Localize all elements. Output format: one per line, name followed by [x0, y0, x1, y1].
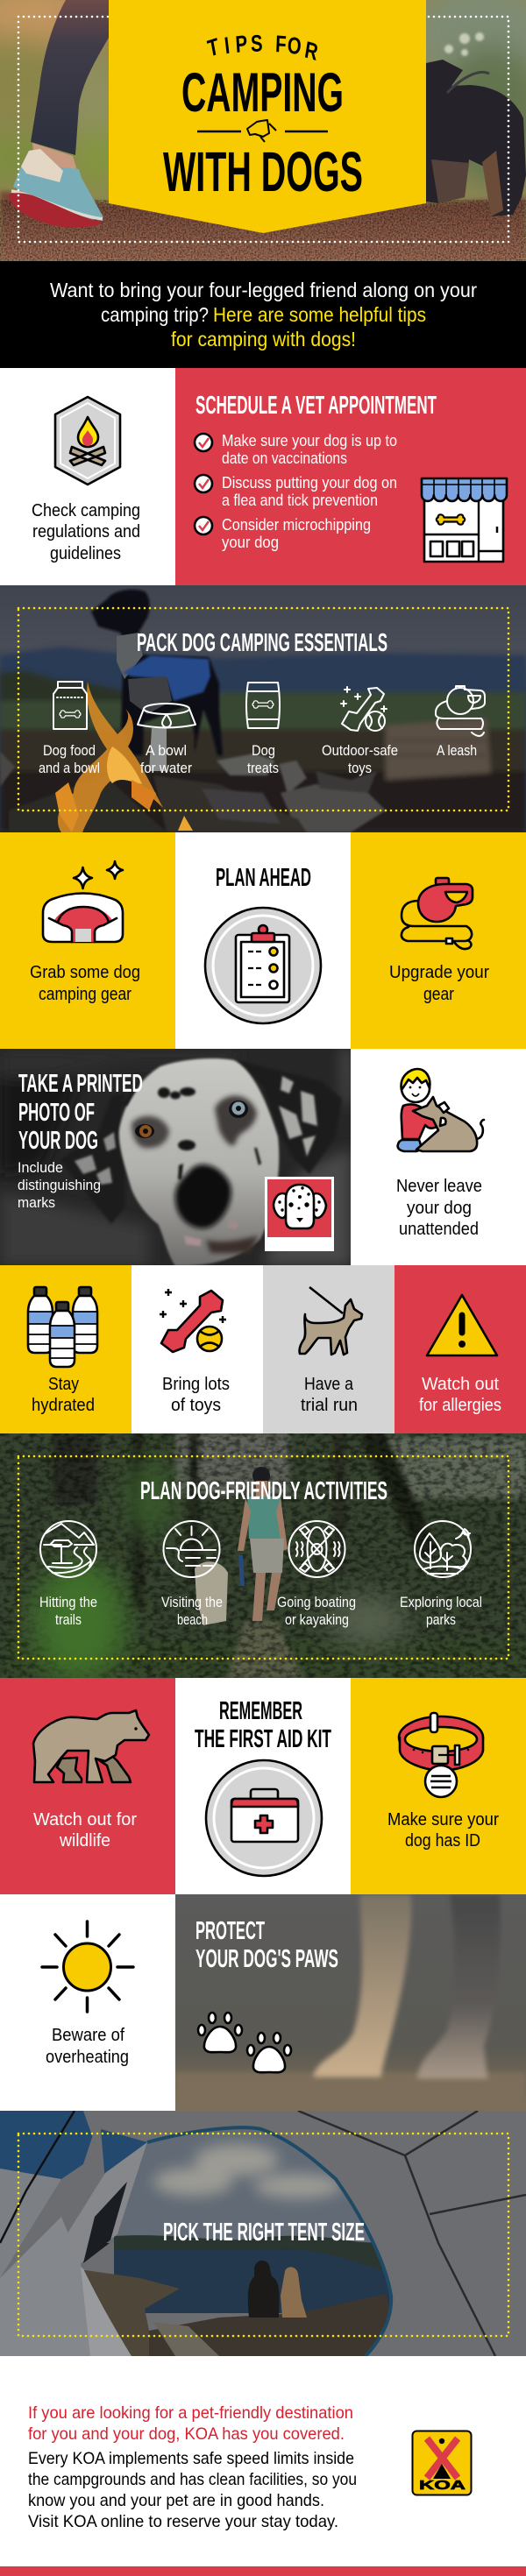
photo: hiker and dog — [195, 1467, 288, 1625]
intro text: Here are some helpful tips — [213, 303, 426, 326]
text: never leave your dog unattended — [396, 1177, 482, 1239]
text: make sure your dog has id: Make sure your — [387, 1810, 499, 1829]
intro text: Want to bring your four-legged friend along on your — [50, 279, 477, 301]
text: stay hydrated: Stay — [48, 1375, 79, 1394]
heading: protect your dog's paws: PROTECT — [195, 1917, 265, 1945]
photo: dalmatian — [0, 1049, 351, 1266]
icon: water bowl — [138, 704, 195, 727]
icon: paw prints — [198, 2013, 291, 2072]
icon: water bottles — [28, 1287, 97, 1367]
text: exploring local parks: parks — [426, 1612, 456, 1628]
text: going boating or kayaking — [277, 1595, 356, 1628]
checklist: Make sure your dog is up to — [222, 432, 397, 449]
icon: dog treats — [246, 683, 280, 728]
text: outdoor-safe toys: Outdoor-safe — [322, 743, 398, 759]
footer text: Visit KOA online to reserve your stay today. — [28, 2512, 338, 2531]
text: have a trial run: Have a — [304, 1375, 354, 1394]
icon: first aid kit plate — [206, 1760, 322, 1876]
icon: leashed dog — [300, 1287, 362, 1355]
text: bring lots of toys: of toys — [171, 1396, 221, 1415]
text: bring lots of toys: Bring lots — [162, 1375, 230, 1394]
heading: remember the first aid kit: THE FIRST AID KIT — [195, 1725, 331, 1753]
title divider with dog icon — [197, 120, 328, 142]
intro text: for camping with dogs! — [171, 328, 356, 350]
text: check camping regulations: Check camping — [32, 501, 140, 520]
checklist: date on vaccinations — [222, 449, 347, 467]
heading: take a printed photo of your dog — [18, 1070, 143, 1155]
text: visiting the beach: beach — [177, 1612, 208, 1628]
panel: have a trial run — [263, 1265, 394, 1433]
icon: kayak — [289, 1521, 345, 1577]
text: never leave your dog unattended: Never leave — [396, 1177, 482, 1196]
icon: sun — [42, 1921, 133, 2012]
text: a bowl for water: for water — [140, 761, 192, 776]
intro text — [50, 279, 477, 350]
title banner — [109, 0, 426, 233]
text: watch out for wildlife — [33, 1810, 137, 1851]
panel: watch out for wildlife — [0, 1678, 175, 1894]
icon: dog food — [53, 682, 87, 729]
panel: printed photo of your dog — [0, 1049, 351, 1266]
text: dog treats — [247, 743, 279, 776]
panel: grab dog camping gear — [0, 832, 175, 1049]
panel: bring lots of toys — [132, 1265, 263, 1433]
text: include distinguishing marks: distinguishing — [18, 1178, 101, 1193]
heading: take a printed photo of your dog: TAKE A PRINTED — [18, 1070, 143, 1098]
text: check camping regulations — [32, 501, 140, 563]
icon: retractable leash — [436, 686, 485, 736]
text: watch out for wildlife: Watch out for — [33, 1810, 137, 1829]
text: exploring local parks — [400, 1595, 482, 1628]
text: check camping regulations: guidelines — [50, 544, 121, 563]
panel: plan ahead — [175, 832, 351, 1049]
text: never leave your dog unattended: unattended — [399, 1220, 479, 1239]
text: upgrade your gear: gear — [423, 985, 454, 1004]
checklist — [195, 432, 397, 551]
text: upgrade your gear: Upgrade your — [389, 963, 489, 982]
text: include distinguishing marks: Include — [18, 1160, 63, 1176]
icon: warning triangle — [427, 1295, 497, 1355]
footer red bar — [0, 2566, 526, 2576]
footer text — [28, 2403, 357, 2531]
footer text: know you and your pet are in good hands. — [28, 2491, 324, 2510]
title: with dogs: WITH DOGS — [163, 140, 363, 203]
text: check camping regulations: regulations and — [32, 522, 140, 541]
panel: schedule a vet appointment — [175, 368, 526, 585]
text: upgrade your gear — [389, 963, 489, 1004]
text: exploring local parks: Exploring local — [400, 1595, 482, 1610]
panel: remember the first aid kit — [175, 1678, 351, 1894]
text: grab some dog camping gear: camping gear — [39, 985, 132, 1004]
text: never leave your dog unattended: your dog — [407, 1199, 472, 1218]
icon: polaroid of dalmatian — [265, 1177, 334, 1251]
intro band — [0, 261, 526, 368]
icon: red leash — [402, 878, 473, 949]
icon: vet store — [422, 478, 507, 562]
photo: forest — [0, 1433, 526, 1678]
heading: remember the first aid kit: REMEMBER — [219, 1697, 302, 1725]
icon: sparkles and dog bed — [43, 861, 123, 942]
footer text: the campgrounds and has clean facilities, so you — [28, 2470, 357, 2489]
icon: campfire badge — [55, 397, 120, 485]
text: include distinguishing marks — [18, 1160, 101, 1211]
panel: upgrade your gear — [351, 832, 526, 1049]
icon: clipboard plate — [205, 908, 321, 1023]
text: visiting the beach — [161, 1595, 223, 1628]
heading: protect your dog's paws — [195, 1917, 338, 1973]
text: hitting the trails: trails — [55, 1612, 82, 1628]
photo: tent door edge and poles — [0, 2111, 526, 2356]
photo: tent walls — [0, 2111, 147, 2356]
text: outdoor-safe toys — [322, 743, 398, 776]
text: stay hydrated: hydrated — [32, 1396, 95, 1415]
photo: mountains — [0, 645, 526, 690]
heading: plan ahead: PLAN AHEAD — [216, 864, 311, 892]
text: outdoor-safe toys: toys — [348, 761, 372, 776]
checklist: a flea and tick prevention — [222, 492, 378, 509]
text: visiting the beach: Visiting the — [161, 1595, 223, 1610]
hero bokeh — [444, 32, 484, 56]
text: a leash: A leash — [437, 743, 477, 759]
text: dog treats: treats — [247, 761, 279, 776]
text: stay hydrated — [32, 1375, 95, 1415]
text: include distinguishing marks: marks — [18, 1195, 55, 1211]
text: watch out for allergies — [419, 1375, 501, 1415]
intro text: camping trip? — [101, 303, 209, 326]
footer text: for you and your dog, KOA has you covered. — [28, 2424, 345, 2444]
text: a bowl for water: A bowl — [146, 743, 187, 759]
hero dog — [426, 60, 526, 216]
text: dog treats: Dog — [252, 743, 275, 759]
text: hitting the trails: Hitting the — [39, 1595, 97, 1610]
checklist: Consider microchipping — [222, 516, 371, 534]
text: grab some dog camping gear: Grab some dog — [30, 963, 140, 982]
photo: field and ground — [0, 671, 526, 832]
icon: beach — [163, 1521, 219, 1577]
panel: pick the right tent size photo — [0, 2111, 526, 2356]
text: hitting the trails — [39, 1595, 97, 1628]
icon: outdoor toys — [341, 687, 387, 731]
checklist: Discuss putting your dog on — [222, 474, 397, 492]
photo: head — [119, 1058, 279, 1266]
footer text: If you are looking for a pet-friendly destination — [28, 2403, 353, 2423]
text: watch out for allergies: for allergies — [419, 1396, 501, 1415]
logo: koa — [412, 2431, 472, 2495]
panel: never leave your dog unattended — [351, 1049, 526, 1266]
panel: pack dog camping essentials photo — [0, 585, 526, 832]
photo: view through tent door — [79, 2120, 403, 2356]
logo: koa: KOA — [419, 2478, 466, 2493]
icon: collar and tag — [399, 1713, 483, 1797]
photo: rocks and logs — [0, 752, 386, 832]
panel: beware of overheating — [0, 1894, 175, 2111]
panel: plan dog-friendly activities photo — [0, 1433, 526, 1682]
text: make sure your dog has id: dog has ID — [405, 1831, 480, 1851]
footer: koa call to action — [0, 2356, 526, 2576]
photo: campfire flames — [55, 682, 193, 832]
title: camping: CAMPING — [181, 62, 344, 124]
panel: watch out for allergies — [394, 1265, 526, 1433]
text: a bowl for water — [140, 743, 192, 776]
hero: trail photo with walker and dog — [0, 0, 526, 261]
icon: trails — [40, 1521, 96, 1577]
text: going boating or kayaking: Going boating — [277, 1595, 356, 1610]
text: watch out for allergies: Watch out — [422, 1375, 499, 1394]
photo: black dog with blue coat — [91, 590, 223, 771]
text: grab some dog camping gear — [30, 963, 140, 1004]
title: tips for: TIPS FOR — [206, 31, 320, 67]
heading: take a printed photo of your dog: YOUR DOG — [18, 1127, 98, 1155]
photo: right ear — [237, 1060, 342, 1174]
text: dog food and a bowl: and a bowl — [39, 761, 100, 776]
photo: dog legs — [175, 1894, 526, 2111]
icon: bear — [33, 1710, 149, 1782]
checklist: your dog — [222, 534, 279, 551]
walker leg — [31, 0, 109, 155]
footer text: Every KOA implements safe speed limits inside — [28, 2449, 354, 2468]
icon: child hugging dog — [398, 1069, 484, 1151]
text: dog food and a bowl: Dog food — [43, 743, 96, 759]
text: beware of overheating: overheating — [46, 2048, 129, 2067]
text: watch out for wildlife: wildlife — [59, 1831, 110, 1851]
text: beware of overheating — [46, 2026, 129, 2067]
walker shoe — [9, 143, 103, 228]
heading: protect your dog's paws: YOUR DOG'S PAWS — [195, 1945, 338, 1973]
text: beware of overheating: Beware of — [52, 2026, 124, 2045]
text: going boating or kayaking: or kayaking — [285, 1612, 349, 1628]
icon: local parks — [415, 1521, 471, 1577]
panel: make sure your dog has id — [351, 1678, 526, 1894]
text: have a trial run — [301, 1375, 358, 1415]
panel: stay hydrated — [0, 1265, 132, 1433]
panel: check regulations — [0, 368, 175, 585]
heading: remember the first aid kit — [195, 1697, 331, 1753]
photo: left ear — [60, 1093, 125, 1224]
heading: pick the right tent size: PICK THE RIGHT TENT SIZE — [163, 2219, 365, 2247]
photo: person and dog — [248, 2261, 307, 2318]
text: dog food and a bowl — [39, 743, 100, 776]
panel: protect your dog's paws — [175, 1894, 526, 2111]
text: have a trial run: trial run — [301, 1396, 358, 1415]
text: bring lots of toys — [162, 1375, 230, 1415]
heading: take a printed photo of your dog: PHOTO OF — [18, 1099, 95, 1127]
text: make sure your dog has id — [387, 1810, 499, 1851]
icon: bone and ball — [160, 1289, 226, 1352]
